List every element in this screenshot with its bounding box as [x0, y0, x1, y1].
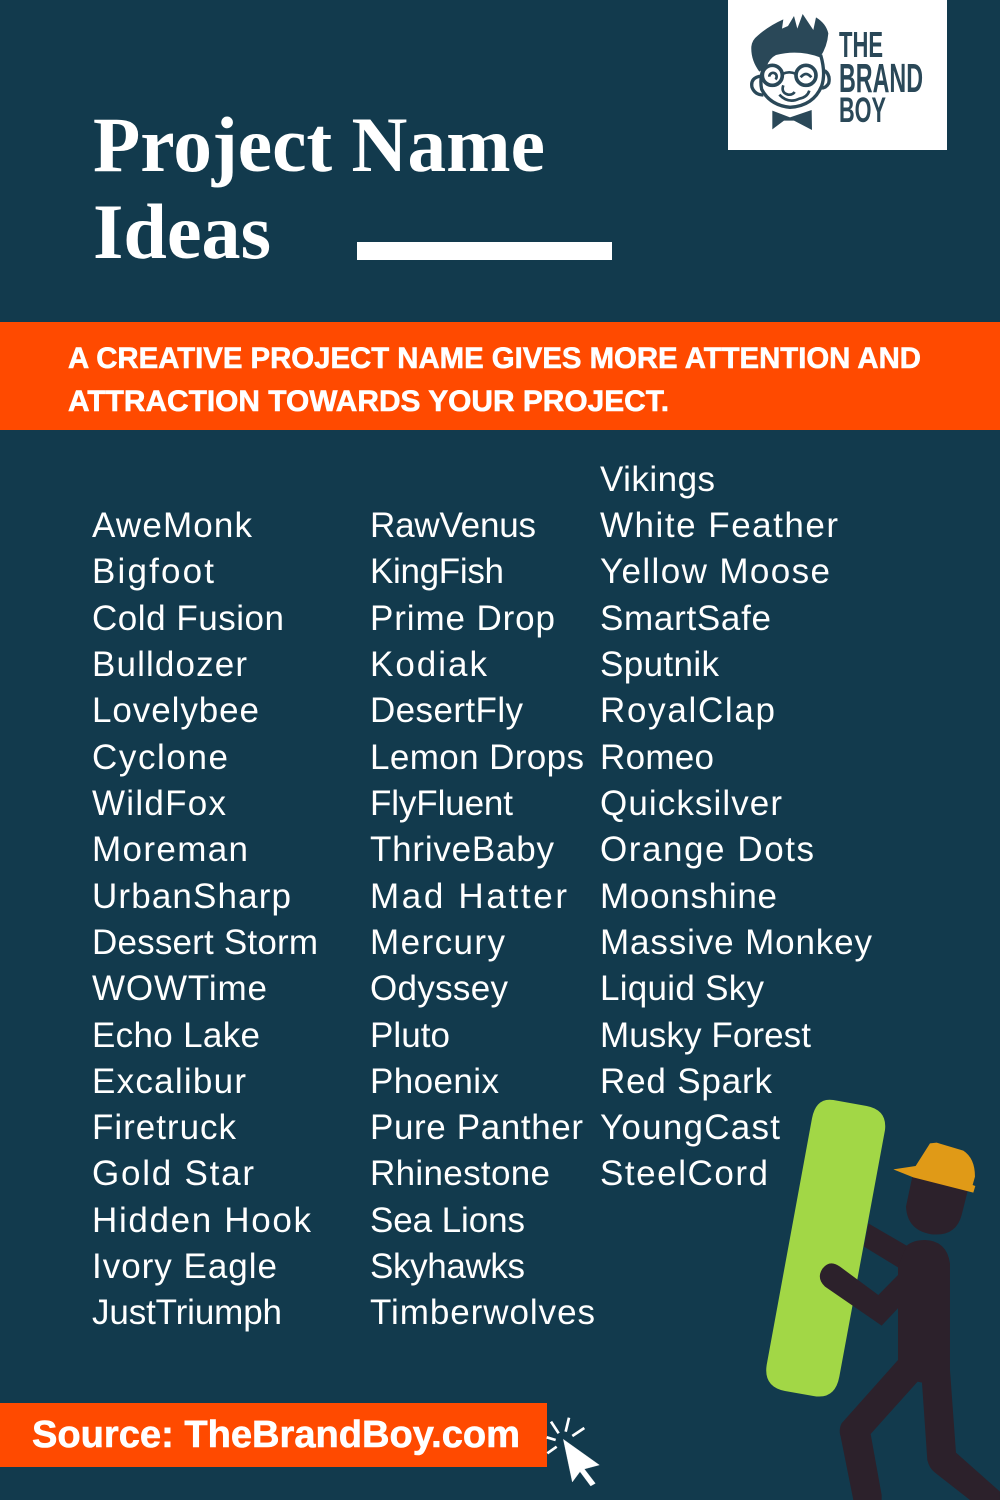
- name list: column 3: White Feather: [600, 506, 838, 545]
- name list: column 2: Skyhawks: [370, 1247, 525, 1286]
- logo: [728, 0, 947, 150]
- name list: column 3: [600, 460, 872, 1193]
- name list: column 1: WildFox: [92, 784, 226, 823]
- name list: column 1: Excalibur: [92, 1062, 246, 1101]
- icon: click cursor: [547, 1418, 599, 1486]
- name list: column 1: AweMonk: [92, 506, 252, 545]
- logo wordmark: BOY: [839, 91, 886, 130]
- name list: column 3: YoungCast: [600, 1108, 780, 1147]
- name list: column 1: Dessert Storm: [92, 923, 318, 962]
- name list: column 3: Moonshine: [600, 877, 777, 916]
- name list: column 1: UrbanSharp: [92, 877, 291, 916]
- name list: column 2: Pluto: [370, 1016, 450, 1055]
- title: Ideas: [93, 188, 271, 275]
- name list: column 2: Rhinestone: [370, 1154, 550, 1193]
- name list: column 2: KingFish: [370, 552, 504, 591]
- source text: Source: TheBrandBoy.com: [32, 1414, 520, 1456]
- name list: column 1: Moreman: [92, 830, 248, 869]
- name list: column 1: Bigfoot: [92, 552, 214, 591]
- logo wordmark: THE: [839, 24, 883, 65]
- name list: column 3: Romeo: [600, 738, 714, 777]
- name list: column 2: Pure Panther: [370, 1108, 583, 1147]
- name list: column 3: SteelCord: [600, 1154, 768, 1193]
- name list: column 3: Orange Dots: [600, 830, 814, 869]
- name list: column 2: Phoenix: [370, 1062, 500, 1101]
- name list: column 1: Firetruck: [92, 1108, 236, 1147]
- banner text: ATTRACTION TOWARDS YOUR PROJECT.: [68, 385, 669, 418]
- name list: column 3: Musky Forest: [600, 1016, 811, 1055]
- source bar: [0, 1403, 547, 1467]
- banner text: [68, 342, 921, 418]
- back arm: [864, 1223, 908, 1267]
- name list: column 3: Red Spark: [600, 1062, 772, 1101]
- illustration: worker carrying green board: [766, 1100, 1000, 1500]
- name list: column 3: Liquid Sky: [600, 969, 764, 1008]
- name list: column 1: JustTriumph: [92, 1293, 282, 1332]
- worker body: [820, 1240, 1000, 1500]
- title: [93, 101, 545, 275]
- name list: column 3: RoyalClap: [600, 691, 775, 730]
- name list: column 1: Bulldozer: [92, 645, 247, 684]
- name list: column 1: Ivory Eagle: [92, 1247, 277, 1286]
- name list: column 1: Cyclone: [92, 738, 228, 777]
- name list: column 2: Mercury: [370, 923, 506, 962]
- orange banner: [0, 322, 1000, 430]
- name list: column 2: DesertFly: [370, 691, 524, 730]
- logo wordmark: [839, 24, 923, 130]
- name list: column 3: SmartSafe: [600, 599, 771, 638]
- name list: column 2: [370, 506, 595, 1332]
- name list: column 3: Vikings: [600, 460, 715, 499]
- name list: column 3: Yellow Moose: [600, 552, 830, 591]
- name list: column 1: Hidden Hook: [92, 1201, 312, 1240]
- name list: column 2: Sea Lions: [370, 1201, 525, 1240]
- name list: column 3: Sputnik: [600, 645, 720, 684]
- icon: brand boy face: [751, 14, 829, 130]
- name list: column 2: Lemon Drops: [370, 738, 584, 777]
- name list: column 2: Mad Hatter: [370, 877, 567, 916]
- name list: column 2: Timberwolves: [370, 1293, 595, 1332]
- name list: column 1: Cold Fusion: [92, 599, 284, 638]
- name list: column 1: Lovelybee: [92, 691, 259, 730]
- name list: column 1: WOWTime: [92, 969, 267, 1008]
- banner text: A CREATIVE PROJECT NAME GIVES MORE ATTENTION AND: [68, 342, 921, 375]
- name list: column 2: ThriveBaby: [370, 830, 554, 869]
- name list: column 1: Echo Lake: [92, 1016, 260, 1055]
- name list: column 2: Prime Drop: [370, 599, 555, 638]
- title underline bar: [357, 242, 612, 260]
- hard hat: [893, 1143, 975, 1193]
- green board: [766, 1100, 885, 1397]
- name list: column 2: FlyFluent: [370, 784, 513, 823]
- name list: column 3: Quicksilver: [600, 784, 782, 823]
- worker head: [906, 1175, 968, 1235]
- name list: column 1: Gold Star: [92, 1154, 254, 1193]
- name list: column 2: Odyssey: [370, 969, 508, 1008]
- name list: column 1: [92, 506, 318, 1332]
- name list: column 2: RawVenus: [370, 506, 536, 545]
- name list: column 3: Massive Monkey: [600, 923, 872, 962]
- name list: column 2: Kodiak: [370, 645, 488, 684]
- title: Project Name: [93, 101, 545, 188]
- logo wordmark: BRAND: [839, 55, 923, 101]
